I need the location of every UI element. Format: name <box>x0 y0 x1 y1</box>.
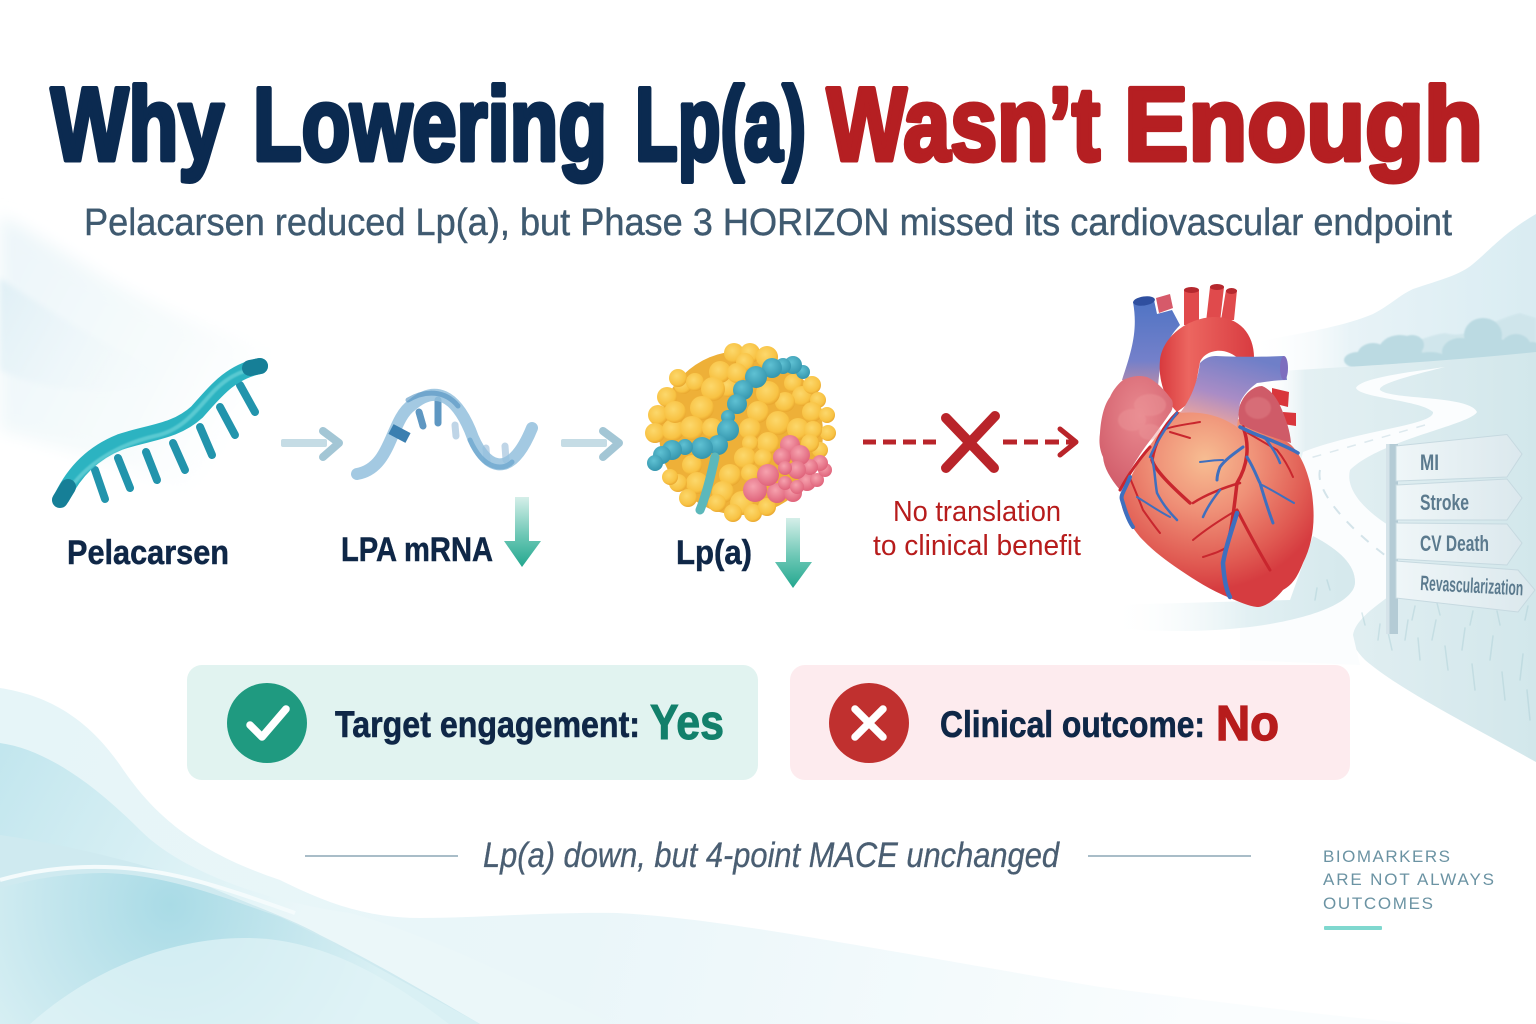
background landscape with winding road <box>1110 214 1536 762</box>
icon: anatomical heart <box>1099 284 1314 607</box>
icon: green check <box>227 683 307 763</box>
caption: no translation to clinical benefit: No translation <box>893 496 1061 528</box>
pulmonary trunk <box>1180 356 1287 427</box>
arrow: mRNA to Lp(a) <box>561 431 619 457</box>
title: Lp(a) <box>635 67 806 183</box>
lower left grass patch <box>1110 536 1355 631</box>
road <box>1240 367 1477 665</box>
text: clinical outcome: Clinical outcome: <box>940 704 1205 745</box>
icon: down arrow for Lp(a) <box>775 518 812 588</box>
sign: Revascularization <box>1396 561 1535 612</box>
label: Lp(a): Lp(a) <box>676 534 752 572</box>
icon: pelacarsen antisense strand <box>60 366 260 500</box>
tree line <box>1344 318 1536 369</box>
title: Why <box>51 67 224 183</box>
back hills <box>1370 313 1536 368</box>
icon: red cross <box>829 683 909 763</box>
side note: biomarkers are not always outcomes: ARE NOT ALWAYS <box>1323 870 1494 889</box>
pink protein cluster <box>743 435 832 503</box>
broken link arrow with X <box>863 416 1076 468</box>
aortic branches <box>1184 287 1237 325</box>
subtitle: Pelacarsen reduced Lp(a), but Phase 3 HORIZON missed its cardiovascular endpoint <box>84 202 1452 244</box>
title <box>51 67 1483 183</box>
signpost with four endpoints <box>1386 434 1535 634</box>
icon: LPA mRNA ribbon <box>357 393 532 474</box>
label: Pelacarsen: Pelacarsen <box>67 534 229 572</box>
left atrium <box>1238 386 1291 443</box>
sign: Stroke <box>1396 479 1522 520</box>
coronary veins blue <box>1122 413 1298 597</box>
sign: MI <box>1396 434 1522 481</box>
right atrium <box>1099 376 1173 490</box>
caption: no translation to clinical benefit: to clinical benefit <box>873 530 1081 562</box>
title: Enough <box>1124 67 1483 183</box>
text: yes: Yes <box>650 696 724 750</box>
sign: Stroke: Stroke <box>1420 490 1469 515</box>
label: LPA mRNA: LPA mRNA <box>341 531 493 569</box>
apolipoprotein strand <box>647 356 810 471</box>
panel: target engagement yes <box>187 665 758 780</box>
side note: biomarkers are not always outcomes: BIOMARKERS <box>1323 847 1450 866</box>
icon: lipoprotein a particle <box>645 343 836 522</box>
divider lines <box>305 855 1251 857</box>
bottom takeaway: Lp(a) down, but 4-point MACE unchanged <box>483 836 1060 875</box>
text: no: No <box>1216 697 1279 751</box>
icon: down arrow for mRNA <box>504 497 541 567</box>
title: Lowering <box>253 67 607 183</box>
panel: clinical outcome no <box>790 665 1350 780</box>
aortic arch <box>1160 317 1254 412</box>
superior vena cava <box>1122 300 1180 387</box>
sign: CV Death <box>1396 523 1522 565</box>
side note: biomarkers are not always outcomes <box>1323 847 1494 930</box>
title: Wasn’t <box>827 67 1100 183</box>
caption: no translation to clinical benefit <box>873 496 1081 562</box>
side note: biomarkers are not always outcomes: OUTCOMES <box>1323 894 1433 913</box>
text: target engagement: Target engagement: <box>335 704 640 745</box>
background waves left and bottom <box>0 215 1420 1024</box>
pulmonary vein stubs <box>1272 388 1296 426</box>
coronary arteries red <box>1120 413 1293 570</box>
grass blades <box>1315 580 1530 720</box>
sign: CV Death: CV Death <box>1420 531 1489 556</box>
ventricles <box>1122 411 1314 607</box>
sign: MI: MI <box>1420 450 1439 475</box>
arrow: pelacarsen to mRNA <box>281 431 339 457</box>
